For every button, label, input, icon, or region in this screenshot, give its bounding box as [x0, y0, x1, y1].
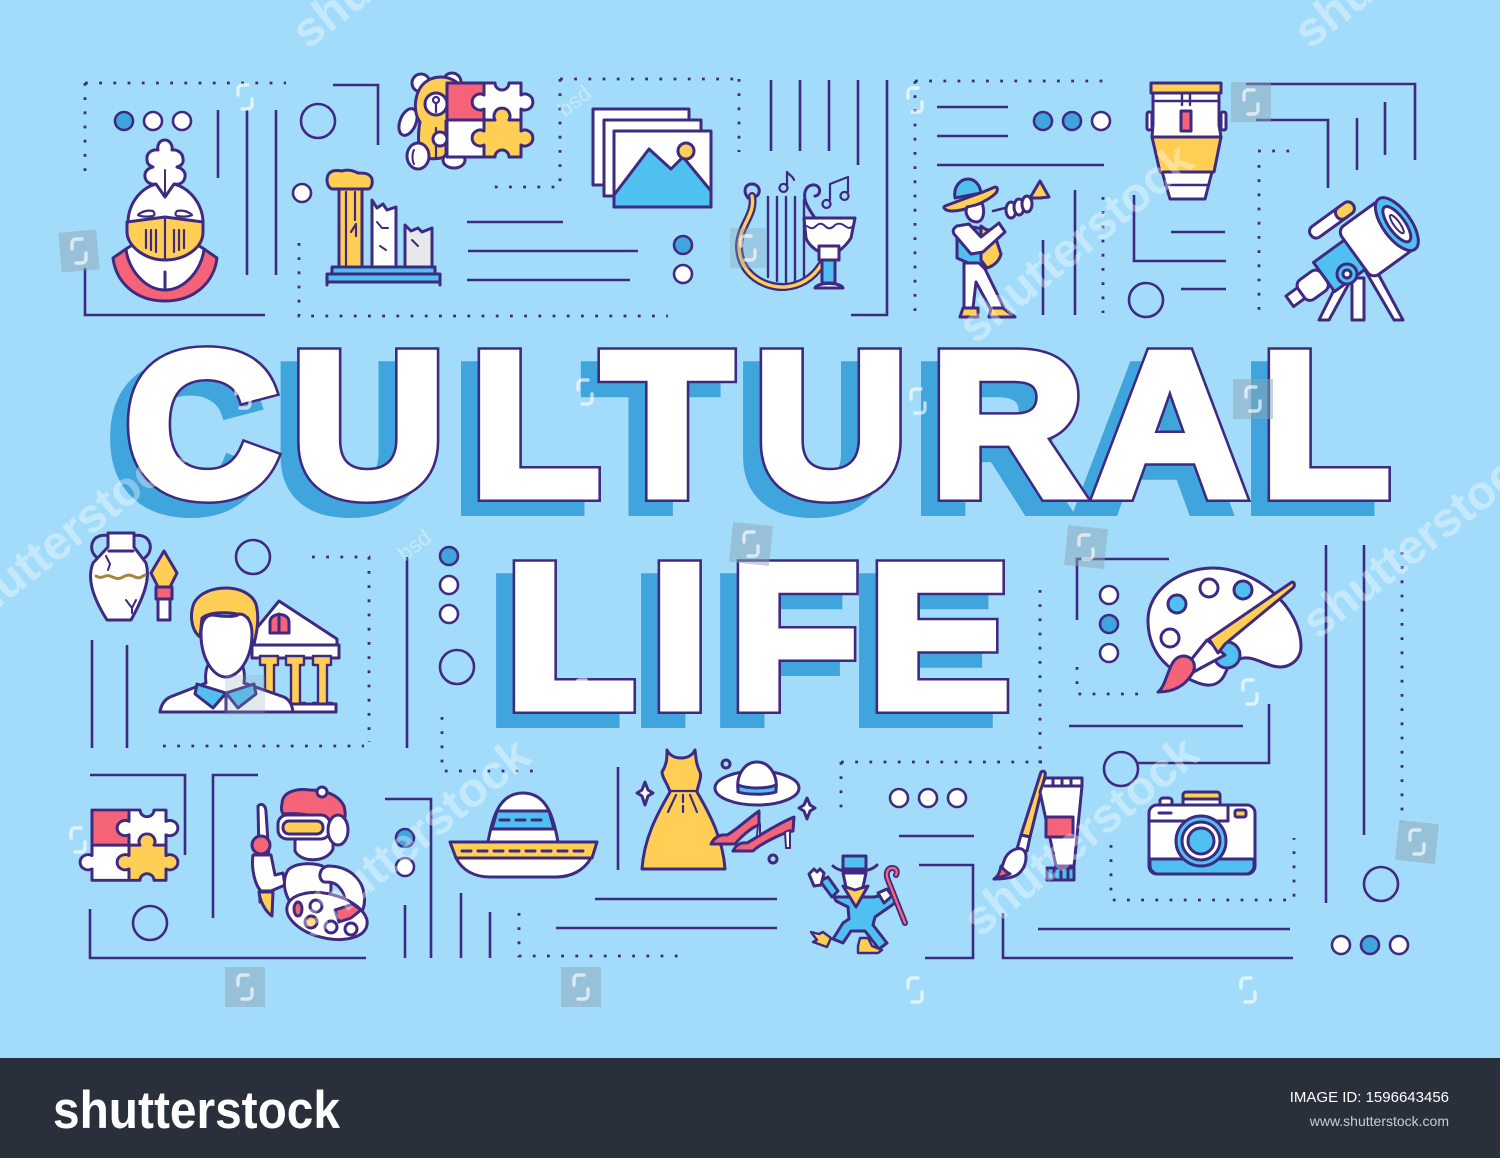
icon: teddy bear and puzzle: [395, 73, 533, 169]
icon: paint brush and tube: [994, 771, 1082, 880]
watermark text: bsd: [885, 674, 928, 716]
icon: camera: [1149, 792, 1255, 874]
icon: dress: [642, 750, 725, 869]
icon: hat: [715, 762, 799, 805]
watermark text: bsd: [553, 80, 596, 122]
title line 2 shadow: LIFE: [489, 535, 994, 766]
watermark badges: [58, 82, 1439, 1007]
decorative frame lines and dots: [85, 79, 1415, 958]
icon: sombrero: [450, 793, 597, 877]
icon: mariachi trumpet player: [944, 179, 1049, 317]
icon: puzzle: [80, 810, 178, 880]
title outline: CULTURAL: CULTURAL: [125, 309, 1391, 540]
watermark text: shutterstock: [949, 133, 1204, 354]
watermark text: shutterstock: [286, 728, 541, 949]
shutterstock logo: shutterstock: [53, 1081, 340, 1140]
watermark text: bsd: [393, 524, 436, 566]
footer bar: [0, 1058, 1500, 1158]
icon: stacked pictures: [593, 109, 711, 207]
icon: telescope: [1262, 177, 1426, 327]
icon: space artist: [252, 787, 372, 947]
title: LIFE: LIFE: [505, 521, 1011, 752]
decorative circles: [115, 104, 1408, 954]
icon: conga drum: [1147, 83, 1226, 199]
title line 1 shadow: CULTURAL: [108, 323, 1374, 554]
watermark text: shutterstock: [954, 726, 1209, 947]
title: CULTURAL: CULTURAL: [125, 309, 1391, 540]
icon: red shoes: [711, 811, 794, 851]
icon: ancient paint brush: [151, 551, 177, 620]
icon: ancient ruined columns: [327, 170, 440, 285]
website: www.shutterstock.com: [1309, 1113, 1449, 1129]
icon: vase: [91, 533, 150, 620]
icon: knight helmet: [113, 140, 217, 301]
icon: sparkles: [637, 760, 815, 863]
watermark marks: [71, 85, 1424, 1002]
puzzle pieces: [447, 83, 533, 157]
icon: paint palette and brush: [1148, 568, 1301, 692]
image id: IMAGE ID: 1596643456: [1290, 1089, 1449, 1106]
title outline: LIFE: LIFE: [505, 521, 1011, 752]
icon: leprechaun: [809, 856, 905, 953]
icon: person and museum: [160, 588, 339, 712]
icon: lyre and goblet: [739, 172, 855, 288]
